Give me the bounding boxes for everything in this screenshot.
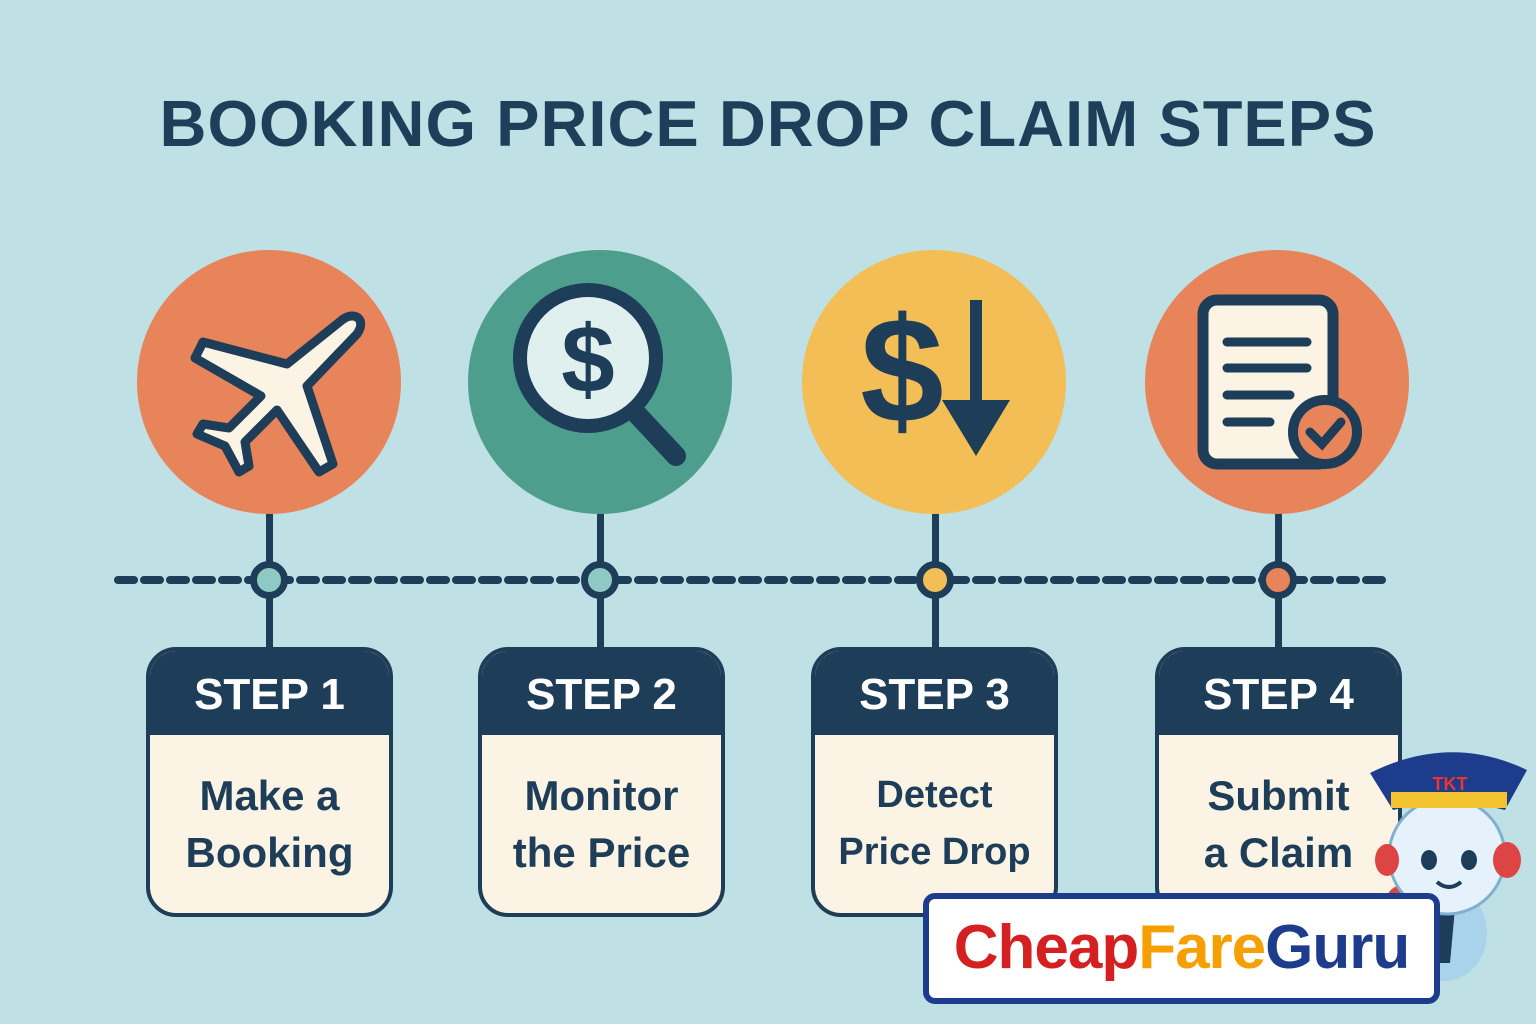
step 4 box: a Claim (1204, 829, 1353, 876)
logo: CheapFareGuru (923, 893, 1440, 1004)
title: BOOKING PRICE DROP CLAIM STEPS (160, 87, 1376, 160)
icon circle: price drop: $ (860, 286, 944, 454)
step 3 box (811, 647, 1058, 917)
step 3 box: STEP 3 (859, 670, 1010, 719)
step 1 box: STEP 1 (194, 670, 345, 719)
mascot: TKT (1432, 774, 1468, 794)
logo: CheapFareGuru: CheapFareGuru (954, 913, 1409, 982)
step 3 box: Price Drop (838, 831, 1031, 873)
icon circle: claim document (1145, 250, 1409, 514)
step 4 box: STEP 4 (1203, 670, 1354, 719)
step 2 box: the Price (513, 829, 690, 876)
step 2 box (478, 647, 725, 917)
step 4 box (1155, 647, 1402, 917)
step 3 box: Detect (876, 774, 993, 816)
step 4 box: Submit (1207, 772, 1350, 819)
timeline dots (250, 561, 1297, 599)
dotted timeline (114, 576, 1386, 584)
icon circle: magnifier dollar (468, 250, 732, 514)
mascot (1370, 752, 1527, 981)
step 1 box (146, 647, 393, 917)
icon circle: magnifier dollar: $ (561, 306, 615, 413)
step 1 box: Booking (186, 829, 353, 876)
connector lines (137, 250, 1526, 1004)
icon circle: price drop (802, 250, 1066, 514)
step 2 box: STEP 2 (526, 670, 677, 719)
icon circle: plane (137, 250, 401, 514)
step 1 box: Make a (199, 772, 340, 819)
step 2 box: Monitor (525, 772, 678, 819)
